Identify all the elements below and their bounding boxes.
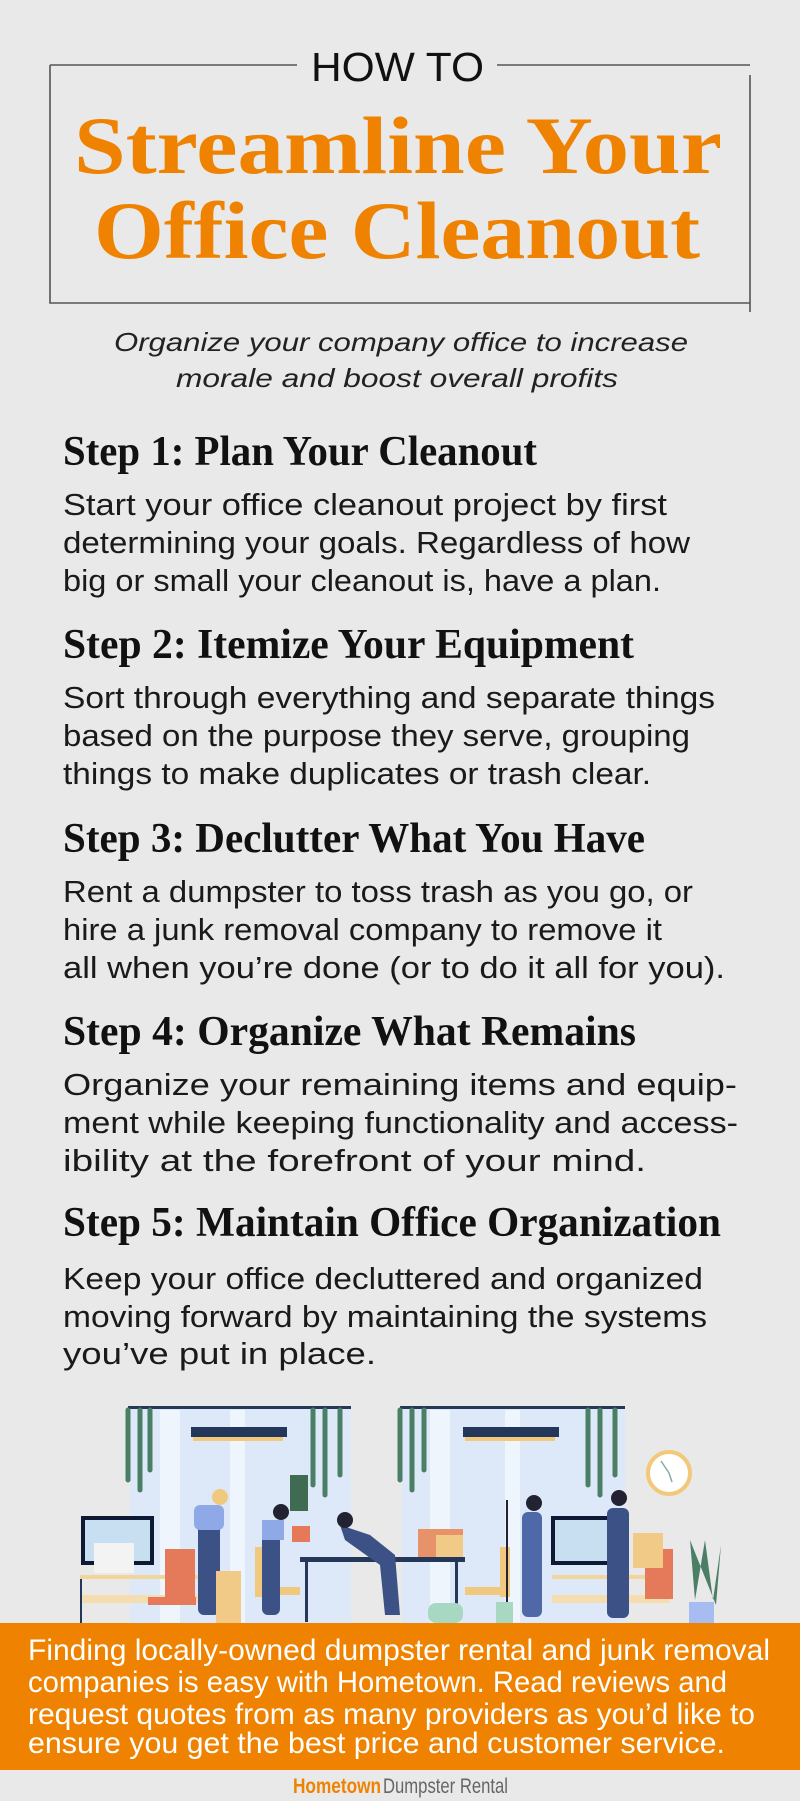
logo [293, 1775, 508, 1798]
hanging plants [128, 1410, 615, 1495]
step 4: Organize your remaining items and equip- [63, 1067, 737, 1102]
step 3: all when you’re done (or to do it all for you). [63, 950, 725, 985]
step 5 [63, 1200, 721, 1371]
illustration: office cleaning scene [80, 1406, 721, 1623]
step 3 [63, 816, 725, 985]
step 5: moving forward by maintaining the systems [63, 1299, 707, 1334]
title: Streamline Your Office Cleanout [74, 100, 722, 276]
step 3: Rent a dumpster to toss trash as you go, or [63, 874, 693, 909]
chairs [148, 1547, 673, 1605]
logo: Dumpster Rental [383, 1775, 508, 1798]
step 2: things to make duplicates or trash clear. [63, 756, 651, 791]
footer callout: companies is easy with Hometown. Read reviews and [28, 1666, 727, 1699]
subtitle: morale and boost overall profits [176, 363, 618, 393]
subtitle: Organize your company office to increase [114, 327, 688, 357]
heading: HOW TO: HOW TO [311, 44, 484, 90]
step 5: Step 5: Maintain Office Organization [63, 1200, 721, 1246]
step 1: big or small your cleanout is, have a plan. [63, 563, 661, 598]
step 1: Start your office cleanout project by first [63, 487, 667, 522]
step 1 [63, 429, 691, 598]
footer callout: Finding locally-owned dumpster rental and junk removal [28, 1634, 770, 1667]
footer callout: request quotes from as many providers as you’d like to [28, 1698, 755, 1731]
step 5: Keep your office decluttered and organized [63, 1261, 703, 1296]
step 3: hire a junk removal company to remove it [63, 912, 662, 947]
title: Streamline Your Office Cleanout: Streamline Your [74, 100, 722, 191]
subtitle [114, 327, 688, 393]
step 1: determining your goals. Regardless of how [63, 525, 691, 560]
step 3: Step 3: Declutter What You Have [63, 816, 645, 862]
step 2 [63, 622, 715, 791]
title: Streamline Your Office Cleanout: Office Cleanout [94, 185, 700, 276]
step 4 [63, 1009, 738, 1178]
clock [648, 1452, 690, 1494]
step 4: Step 4: Organize What Remains [63, 1009, 636, 1055]
step 2: based on the purpose they serve, grouping [63, 718, 690, 753]
logo: Hometown [293, 1775, 381, 1798]
step 2: Sort through everything and separate things [63, 680, 715, 715]
step 4: ment while keeping functionality and access- [63, 1105, 738, 1140]
boxes, vacuum, plants [216, 1475, 721, 1623]
step 4: ibility at the forefront of your mind. [63, 1143, 646, 1178]
title box [50, 44, 750, 312]
footer callout: ensure you get the best price and customer service. [28, 1727, 725, 1760]
footer callout [0, 1623, 800, 1770]
step 1: Step 1: Plan Your Cleanout [63, 429, 537, 475]
people [194, 1489, 663, 1620]
step 5: you’ve put in place. [63, 1336, 376, 1371]
windows [128, 1406, 625, 1623]
desks and monitors [80, 1518, 670, 1623]
step 2: Step 2: Itemize Your Equipment [63, 622, 634, 668]
lamps [191, 1427, 559, 1441]
